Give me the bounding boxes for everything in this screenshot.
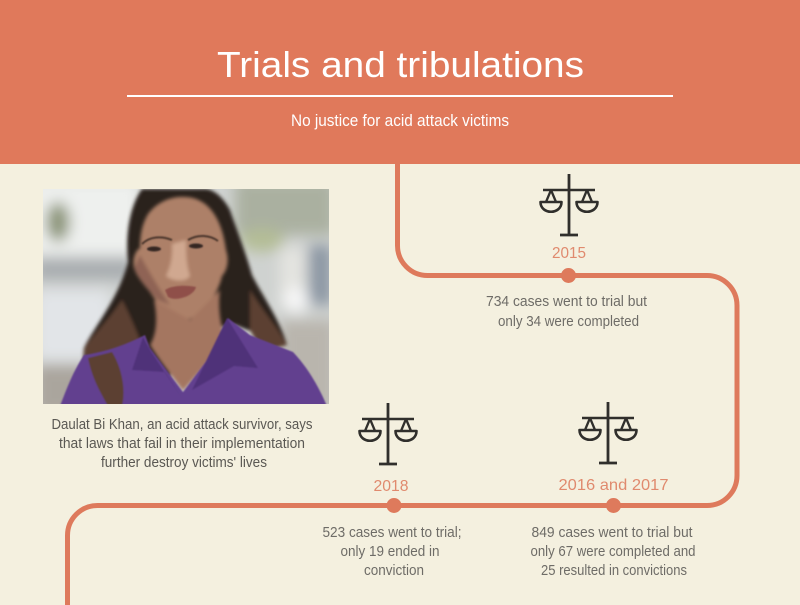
text 2015: 734 cases went to trial but xyxy=(486,293,648,310)
eyes and lips xyxy=(142,236,218,244)
year 2016 and 2017: 2016 and 2017 xyxy=(558,477,669,494)
year 2018: 2018 xyxy=(374,478,409,495)
text 2018 xyxy=(322,524,462,579)
purple shirt xyxy=(60,318,327,406)
marker 2018 xyxy=(386,498,402,513)
photo caption: that laws that fail in their implementation xyxy=(59,435,305,452)
text 2016 and 2017: 849 cases went to trial but xyxy=(532,524,693,541)
photo caption: Daulat Bi Khan, an acid attack survivor, says xyxy=(52,416,312,433)
text 2015: only 34 were completed xyxy=(498,313,639,330)
text 2018: 523 cases went to trial; xyxy=(322,524,462,541)
marker 2016 and 2017 xyxy=(606,498,621,513)
text 2015 xyxy=(486,293,648,330)
photo caption xyxy=(52,416,312,471)
title: Trials and tribulations xyxy=(217,44,584,85)
milestone: 2018 xyxy=(322,403,462,579)
icon: scales 2018 xyxy=(360,403,416,464)
face and neck xyxy=(133,197,228,320)
icon: scales 2016 and 2017 xyxy=(580,402,636,463)
text 2018: conviction xyxy=(364,562,424,579)
header banner xyxy=(0,0,800,164)
photo: Daulat Bi Khan xyxy=(43,189,329,404)
subtitle: No justice for acid attack victims xyxy=(291,112,509,130)
icon: scales 2015 xyxy=(540,174,598,235)
milestone: 2016 and 2017 xyxy=(530,402,696,579)
photo caption: further destroy victims' lives xyxy=(101,454,267,471)
text 2016 and 2017: only 67 were completed and xyxy=(530,543,696,560)
hair xyxy=(80,189,288,376)
marker 2015 xyxy=(561,268,576,283)
year 2015: 2015 xyxy=(552,245,586,262)
text 2018: only 19 ended in xyxy=(340,543,440,560)
milestone: 2015 xyxy=(486,174,648,330)
timeline path xyxy=(68,160,737,605)
text 2016 and 2017 xyxy=(530,524,696,579)
text 2016 and 2017: 25 resulted in convictions xyxy=(541,562,687,579)
